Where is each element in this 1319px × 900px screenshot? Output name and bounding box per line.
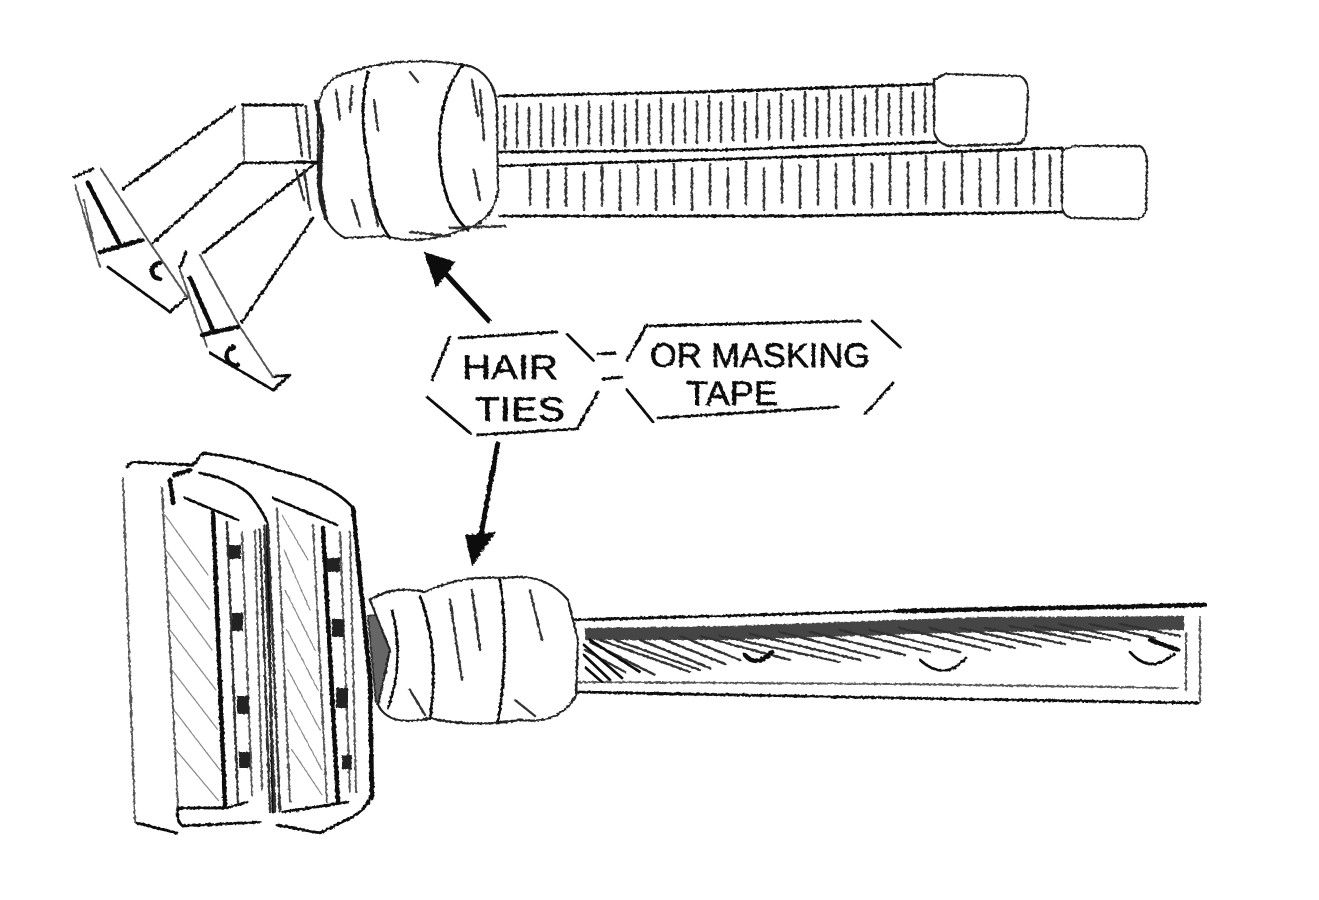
razor head — [123, 453, 372, 833]
top razor blade heads — [74, 169, 290, 390]
upper handle — [498, 74, 1028, 152]
top razor neck and arms — [123, 105, 317, 322]
bottom wrap of hair ties — [370, 577, 578, 724]
razor handle — [573, 605, 1205, 703]
upper handle end block — [934, 74, 1028, 146]
bottom razor — [123, 453, 1205, 833]
arrow: to bottom wrap — [465, 442, 498, 566]
top wrap of hair ties — [316, 61, 505, 240]
lower handle end block — [1062, 146, 1147, 219]
lower handle — [498, 146, 1147, 219]
connector dashes — [598, 353, 622, 379]
callout: hair ties: HAIR — [462, 349, 558, 387]
arrow: to top wrap — [424, 252, 490, 322]
callout: or masking tape — [627, 321, 900, 422]
top razor with two zip-tied handles — [74, 61, 1147, 390]
razor neck — [368, 612, 398, 702]
callout: or masking tape: OR MASKING — [650, 337, 870, 375]
callout: hair ties — [427, 332, 598, 435]
callout: or masking tape: TAPE — [686, 375, 778, 413]
callout: hair ties: TIES — [475, 391, 565, 429]
